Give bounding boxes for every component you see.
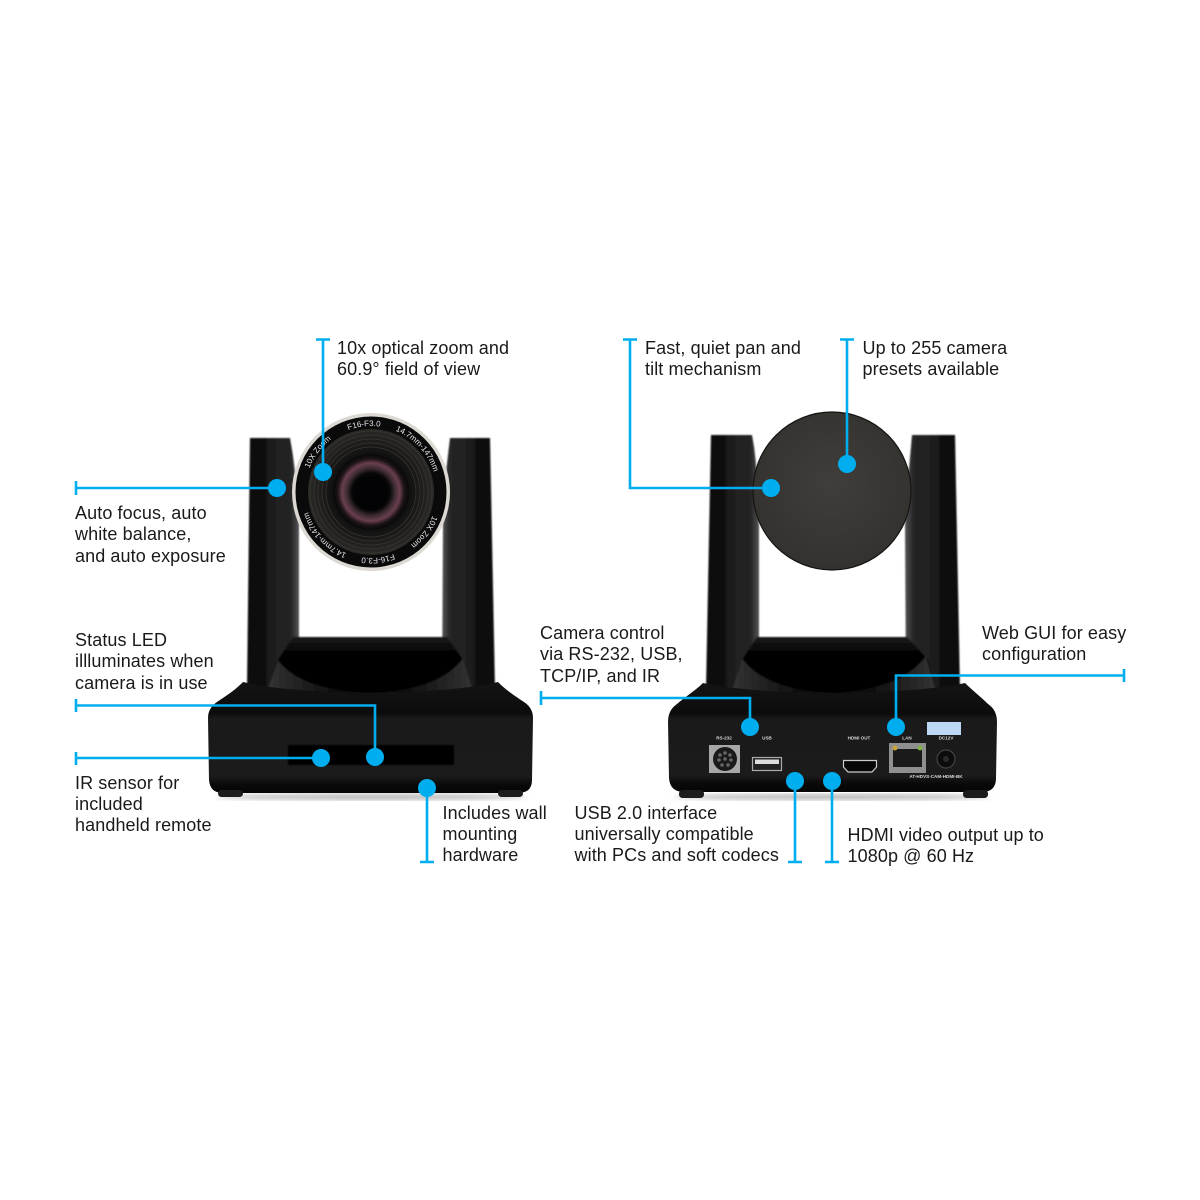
rear right arm (905, 435, 960, 690)
callout: web GUI: Web GUI for easy (982, 623, 1126, 643)
rear camera (668, 412, 997, 800)
callout: IR sensor (75, 749, 330, 835)
callout: wall mount: hardware (442, 845, 518, 865)
lens top markings: F16-F3.0 (347, 420, 380, 430)
callout: IR sensor: IR sensor for (75, 773, 179, 793)
callout: camera presets (838, 338, 1008, 473)
sensor window (288, 745, 454, 765)
callout: auto focus: and auto exposure (75, 546, 226, 566)
lens ribbed surface (308, 429, 434, 555)
port: DC 12V (937, 736, 955, 768)
callout: USB interface: USB 2.0 interface (574, 803, 717, 823)
callout: IR sensor: handheld remote (75, 815, 212, 835)
lens bottom markings: F16-F3.0 (362, 554, 395, 564)
lens top markings: 14.7mm-147mm (396, 426, 438, 472)
port: USB (752, 736, 782, 770)
callout: IR sensor: included (75, 794, 143, 814)
callout: auto focus (74, 479, 286, 566)
port: HDMI (844, 736, 876, 772)
front base (208, 682, 533, 793)
callout: web GUI (887, 623, 1126, 736)
callout: pan and tilt (623, 338, 801, 497)
lens center (354, 476, 388, 510)
front camera ground shadow (216, 794, 526, 800)
lens top markings (305, 420, 438, 472)
port: LAN: LAN (902, 736, 912, 740)
callout: web GUI: configuration (982, 644, 1086, 664)
lens black ring (296, 416, 446, 568)
callout: status LED (75, 630, 384, 766)
callout: status LED: illluminates when (75, 651, 214, 671)
model label: AT-HDVS-CAM-HDMI-BK (909, 774, 963, 779)
callout: optical zoom: 60.9° field of view (337, 359, 481, 379)
port: RS-232 (709, 736, 740, 773)
callout: camera control: Camera control (540, 623, 664, 643)
callout: wall mount (418, 779, 547, 865)
callout: camera control: TCP/IP, and IR (540, 666, 660, 686)
lens assembly (292, 413, 450, 571)
lens silver bezel (292, 413, 450, 571)
callout: wall mount: mounting (442, 824, 517, 844)
rear saddle (732, 637, 936, 697)
port: USB: USB (762, 736, 773, 740)
port: LAN (889, 736, 926, 773)
callout: camera control (540, 623, 759, 736)
port: RS-232: RS-232 (716, 736, 732, 740)
callout: status LED: Status LED (75, 630, 167, 650)
callout: camera presets: Up to 255 camera (862, 338, 1008, 358)
serial sticker (927, 722, 961, 735)
lens top markings: 10X Zoom (305, 436, 331, 468)
port: HDMI: HDMI OUT (848, 736, 871, 740)
rear camera ground shadow (674, 794, 990, 800)
callout: pan and tilt: tilt mechanism (645, 359, 761, 379)
rear disc (753, 412, 911, 570)
callout: HDMI output: 1080p @ 60 Hz (848, 846, 974, 866)
callout: HDMI output: HDMI video output up to (848, 825, 1044, 845)
front feet (218, 790, 523, 797)
callout: USB interface: universally compatible (574, 824, 754, 844)
front saddle lip (267, 658, 473, 695)
rear base (668, 683, 997, 792)
lens ribs (310, 431, 432, 553)
front camera (208, 413, 533, 801)
callout: USB interface: with PCs and soft codecs (574, 845, 779, 865)
callout: USB interface (574, 772, 804, 865)
callout: camera control: via RS-232, USB, (540, 644, 683, 664)
lens bottom markings: 14.7mm-147mm (304, 512, 346, 558)
callout: optical zoom (314, 338, 509, 481)
callout: status LED: camera is in use (75, 673, 208, 693)
callout: HDMI output (823, 772, 1044, 866)
callout: auto focus: white balance, (74, 524, 191, 544)
lens bottom markings: 10X Zoom (411, 516, 437, 548)
rear saddle lip (732, 656, 936, 695)
front left arm (247, 438, 299, 690)
callout: auto focus: Auto focus, auto (75, 503, 207, 523)
rear feet (679, 790, 988, 798)
callout: wall mount: Includes wall (442, 803, 547, 823)
callout: optical zoom: 10x optical zoom and (337, 338, 509, 358)
lens glass (333, 454, 409, 530)
callout: camera presets: presets available (862, 359, 999, 379)
port: DC 12V: DC12V (939, 736, 954, 740)
lens bottom markings (304, 512, 437, 564)
callout: pan and tilt: Fast, quiet pan and (645, 338, 801, 358)
rear left arm (706, 435, 759, 690)
front right arm (442, 438, 495, 690)
front saddle (267, 637, 473, 697)
